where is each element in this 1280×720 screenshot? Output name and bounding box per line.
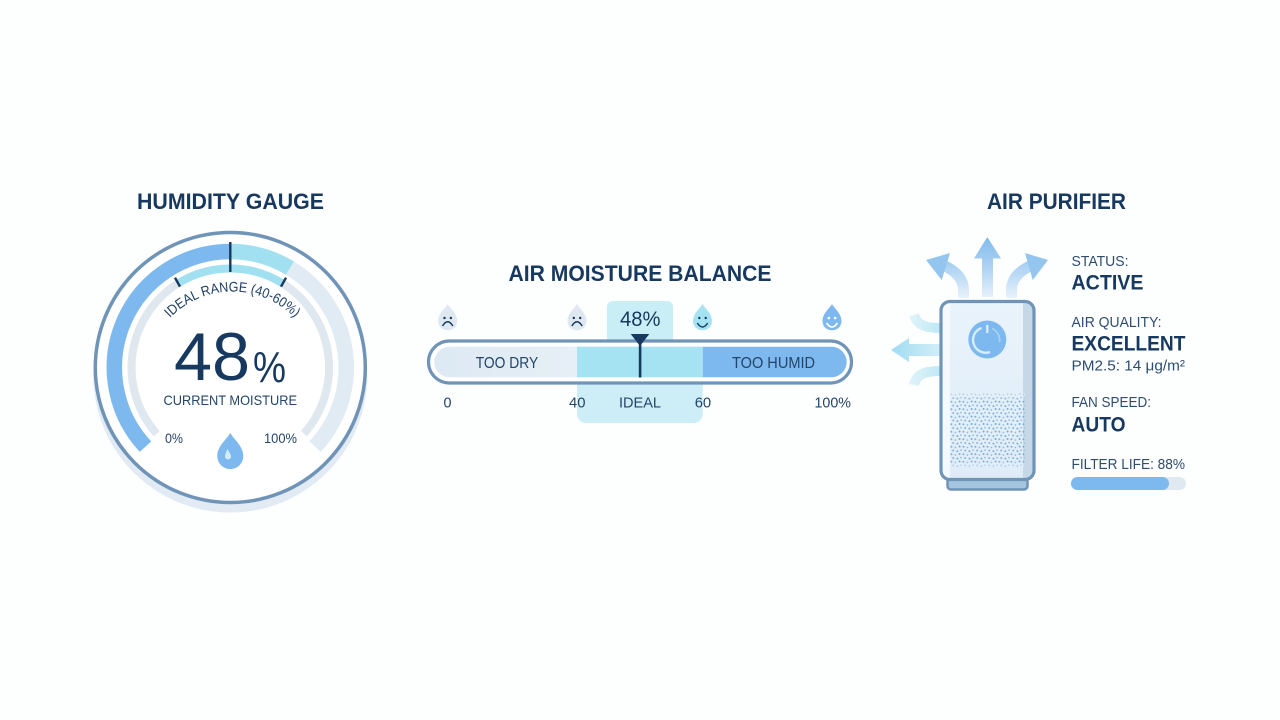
label: too humid: TOO HUMID: [732, 355, 815, 372]
scale label: ideal: IDEAL: [619, 394, 661, 412]
gauge value: 48%: [174, 319, 286, 395]
ideal highlight: bottom tab: [577, 384, 703, 423]
heading: humidity gauge: HUMIDITY GAUGE: [137, 189, 324, 214]
icon: happy drop, ideal: [693, 304, 712, 330]
outer arc: ideal portion: [230, 252, 290, 268]
marker: 48% pointer: [631, 334, 649, 378]
gauge ticks: [175, 242, 286, 287]
heading: air moisture balance: AIR MOISTURE BALANCE: [508, 261, 772, 286]
icon: sad drop, very dry: [438, 304, 457, 330]
segment: too humid: [703, 347, 847, 377]
purifier base: [948, 478, 1028, 490]
label: pm2.5: PM2.5: 14 μg/m²: [1072, 358, 1185, 374]
outer arc: remainder: [290, 268, 346, 447]
label: 100%: 100%: [264, 431, 297, 446]
panel: purifier status readouts: [1071, 253, 1186, 490]
purifier body: [941, 302, 1034, 480]
arrow: left lower stream: [914, 371, 941, 385]
scale label: 0: 0: [444, 394, 452, 412]
panel: air moisture balance: [428, 261, 852, 423]
icon: happy drop, humid: [822, 304, 842, 330]
gauge dial ring: [93, 232, 367, 512]
arrow: up right curved: [1012, 253, 1048, 298]
purifier vent dots: [950, 393, 1025, 467]
curved label: ideal range: IDEAL RANGE (40-60%): [164, 282, 300, 318]
gauge value: 48%: %: [253, 343, 286, 392]
value: 48%: 48%: [620, 307, 660, 331]
label: too dry: TOO DRY: [476, 355, 538, 372]
label: air quality: AIR QUALITY:: [1072, 314, 1162, 331]
ideal highlight: top tab: [607, 301, 673, 340]
arrow: left upper stream: [914, 315, 941, 328]
value: active: ACTIVE: [1072, 270, 1144, 294]
label: fan speed: FAN SPEED:: [1072, 394, 1151, 411]
arrow: up left curved: [926, 253, 964, 298]
scale label: 40: 40: [569, 394, 586, 412]
value: auto: AUTO: [1072, 412, 1126, 436]
arrow: left: [891, 338, 941, 362]
icon: power button: [968, 320, 1006, 358]
outer arc: current moisture: [114, 252, 230, 447]
filter life bar: [1071, 477, 1186, 490]
scale label: 60: 60: [695, 394, 711, 412]
balance bar: [428, 341, 852, 383]
label: current moisture: CURRENT MOISTURE: [164, 392, 297, 408]
panel: humidity gauge: [93, 189, 368, 512]
label: filter life: FILTER LIFE: 88%: [1072, 456, 1185, 473]
segment: ideal: [577, 347, 703, 377]
icon: water drop: [217, 433, 243, 469]
inner arc: ideal range track: [132, 269, 329, 434]
icon: sad drop, dry: [568, 304, 586, 330]
label: 0%: 0%: [165, 431, 183, 446]
scale label: 100%: 100%: [814, 394, 851, 412]
panel: air purifier: [891, 189, 1126, 490]
segment: too dry: [434, 347, 577, 377]
gauge value: 48%: 48: [174, 319, 250, 395]
value: excellent: EXCELLENT: [1072, 332, 1186, 356]
label: status: STATUS:: [1072, 253, 1128, 270]
heading: air purifier: AIR PURIFIER: [987, 189, 1126, 214]
arrow: up: [974, 237, 1001, 297]
